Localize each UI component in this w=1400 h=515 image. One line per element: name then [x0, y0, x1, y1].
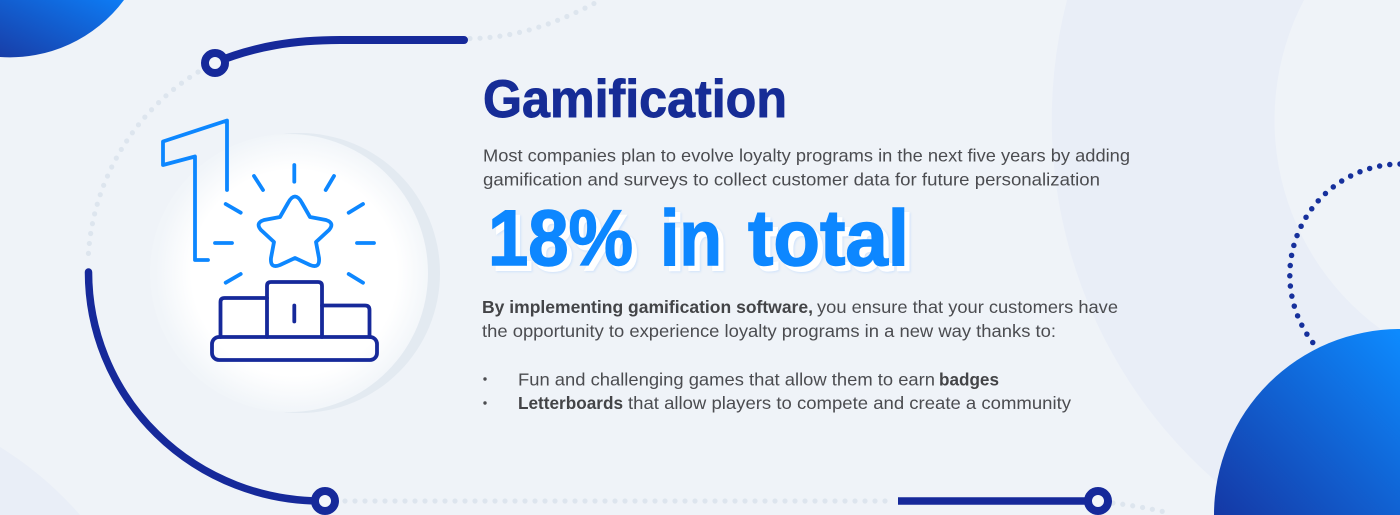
bullet list — [483, 370, 1071, 413]
bullet one: badges — [939, 370, 999, 390]
dark arc left — [88, 272, 322, 501]
node top — [205, 53, 225, 73]
paragraph: you ensure that your customers have — [817, 297, 1118, 317]
big statistic — [488, 193, 914, 287]
intro text: gamification and surveys to collect customer data for future personalization — [483, 170, 1100, 190]
statistic shadow — [492, 198, 914, 287]
paragraph: By implementing gamification software, — [482, 297, 813, 317]
title: Gamification — [483, 70, 787, 129]
icon: star with rays — [215, 165, 374, 283]
paragraph — [482, 297, 1118, 341]
icon: podium — [212, 282, 377, 360]
paragraph: the opportunity to experience loyalty programs in a new way thanks to: — [482, 321, 1056, 341]
statistic text: 18% — [488, 193, 633, 282]
dark line bottom right — [898, 497, 1098, 505]
statistic text — [488, 193, 909, 282]
medallion disc — [150, 133, 440, 413]
background: faint shape bottom left — [0, 447, 80, 515]
blue circle bottom right — [1214, 329, 1400, 515]
statistic shadow: 18% — [492, 198, 638, 287]
statistic shadow: in — [665, 198, 727, 287]
dark arc top — [214, 40, 464, 63]
bullet two: Letterboards — [518, 393, 623, 413]
intro text: Most companies plan to evolve loyalty programs in the next five years by adding — [483, 146, 1130, 166]
statistic text: in — [660, 193, 722, 282]
bullet one: Fun and challenging games that allow them to earn — [518, 370, 935, 390]
icon: number one outline — [163, 120, 227, 260]
dotted arc right — [1290, 164, 1400, 350]
blue circle top left — [0, 0, 124, 57]
bullet two: that allow players to compete and create a community — [628, 393, 1071, 413]
pale dotted connectors — [88, 3, 1165, 512]
node bottom — [315, 491, 335, 511]
timeline ring with connectors — [88, 3, 1165, 512]
node bottom right — [1088, 491, 1108, 511]
background: large arc shape right — [1052, 0, 1400, 515]
statistic text: total — [748, 193, 909, 282]
statistic shadow: total — [753, 198, 914, 287]
intro text — [483, 146, 1130, 190]
